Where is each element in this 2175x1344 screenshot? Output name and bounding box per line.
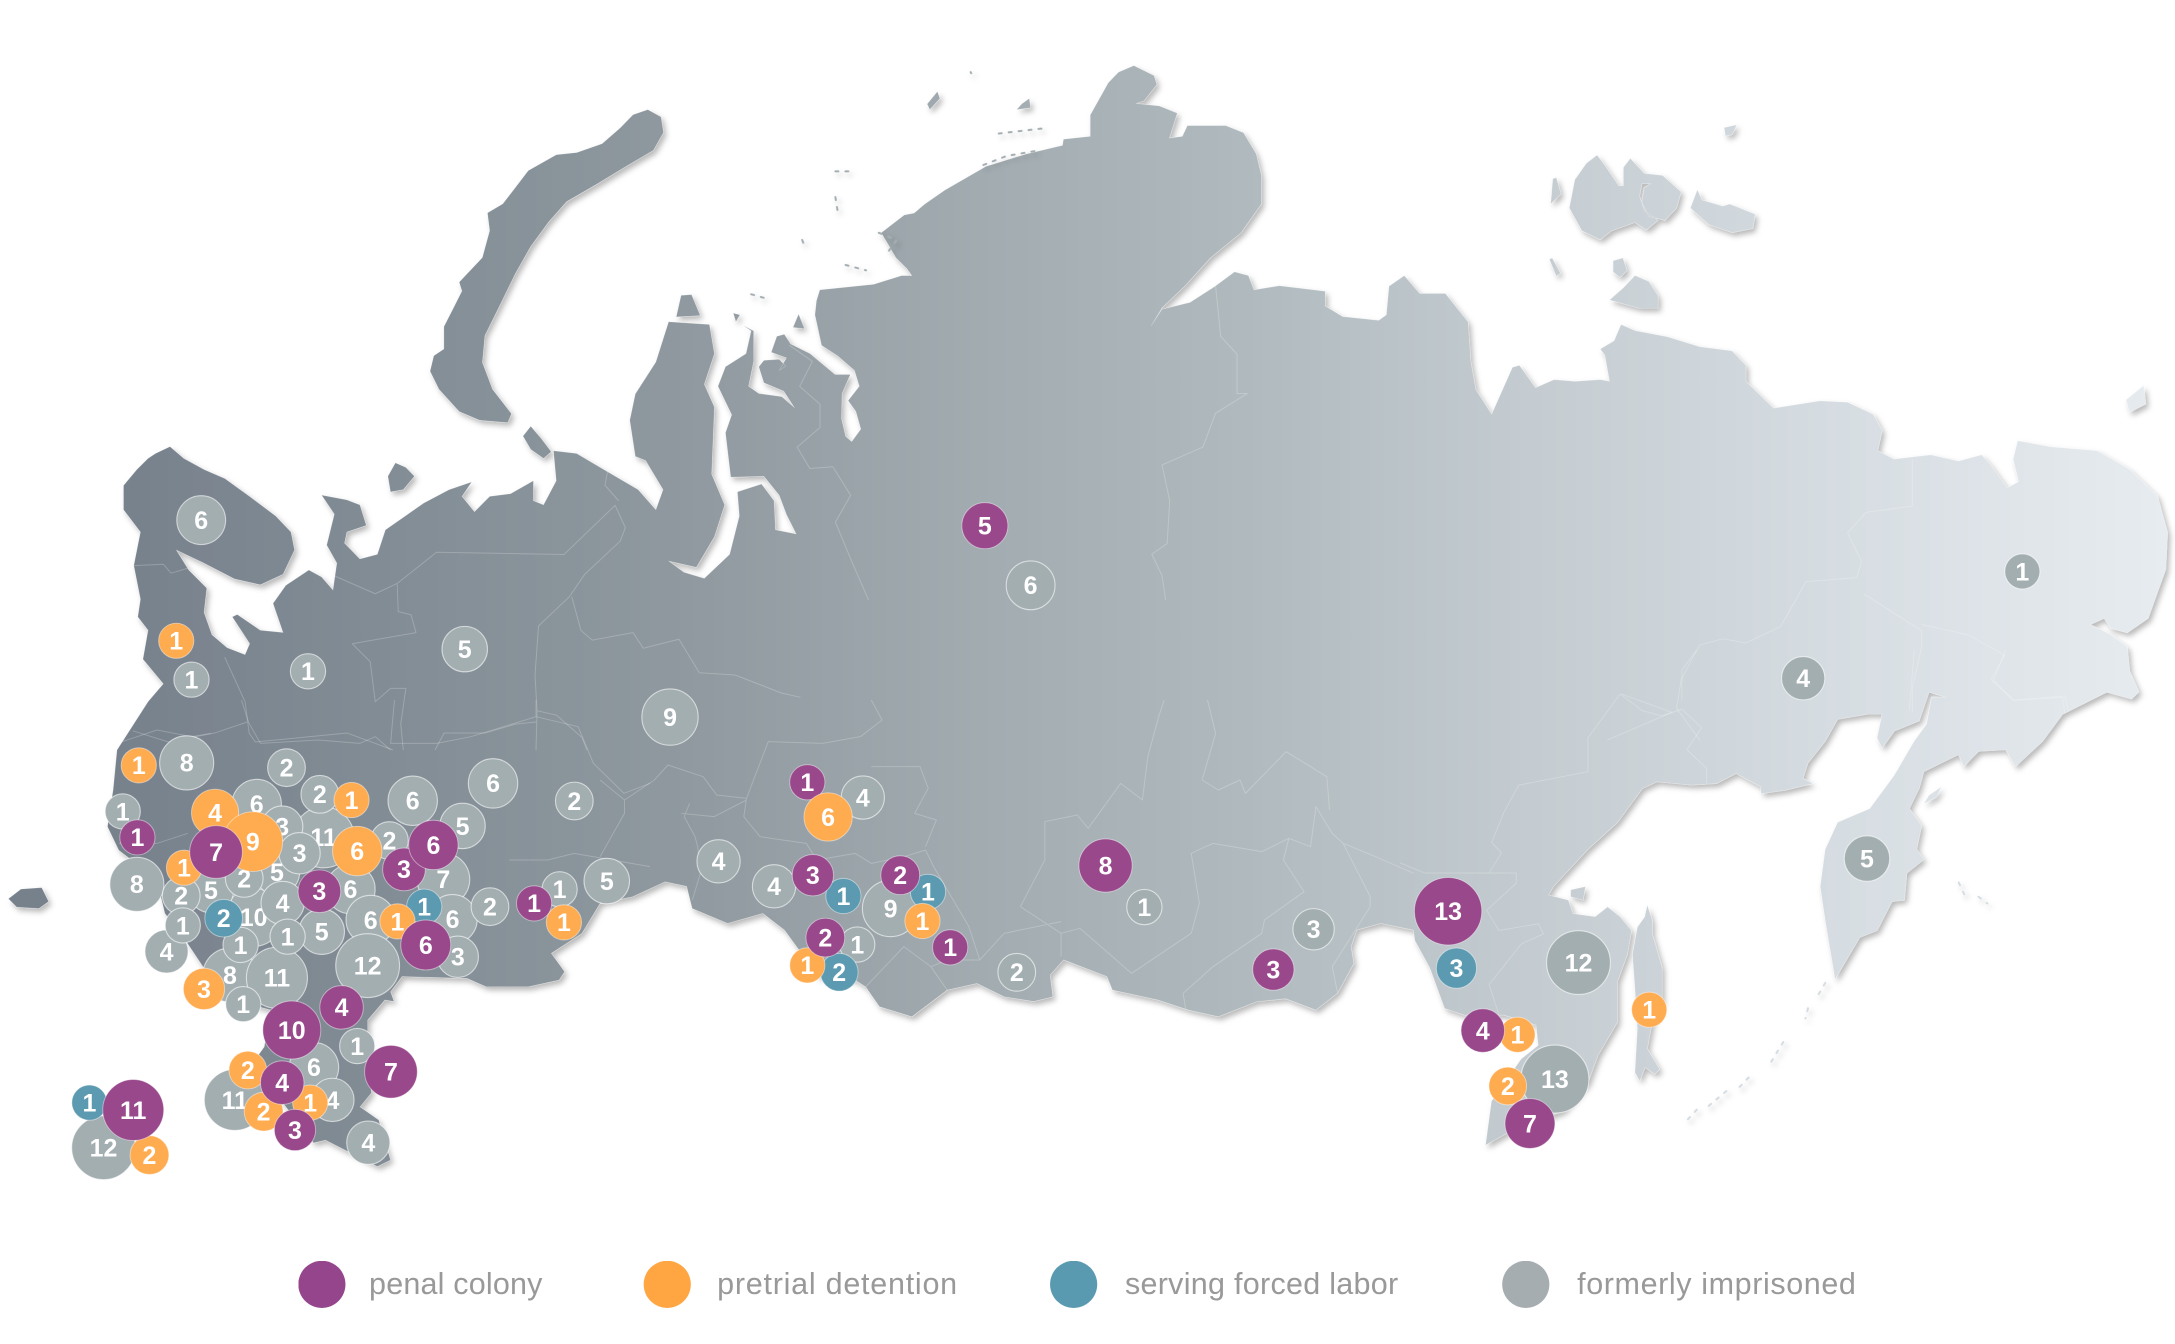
marker: serving forced labor 1: 1 [417,894,431,922]
marker: penal colony 4 [260,1061,304,1104]
marker: formerly imprisoned 3 [1293,909,1334,950]
marker: pretrial detention 4 [192,789,239,836]
marker: formerly imprisoned 8: 8 [130,871,144,899]
marker: penal colony 10 [263,1001,321,1059]
marker: formerly imprisoned 11: 11 [264,965,290,993]
marker: formerly imprisoned 1 [1127,889,1162,925]
marker: penal colony 1 [516,886,552,921]
marker: serving forced labor 1 [826,878,861,914]
marker: formerly imprisoned 4 [841,776,884,819]
marker: formerly imprisoned 6 [468,759,518,808]
marker: formerly imprisoned 6: 6 [364,907,378,935]
marker: formerly imprisoned 13: 13 [1541,1066,1569,1094]
marker: formerly imprisoned 6 [177,496,226,545]
marker: penal colony 4: 4 [1476,1017,1490,1045]
region borders [117,286,2072,1017]
legend item: formerly imprisoned: formerly imprisoned [1577,1267,1856,1301]
marker: penal colony 5: 5 [978,513,992,541]
marker: penal colony 1: 1 [800,769,814,797]
marker: pretrial detention 2 [229,1051,267,1089]
marker: pretrial detention 2 [244,1092,283,1131]
marker: formerly imprisoned 7 [417,853,470,906]
marker: penal colony 7 [190,826,242,878]
marker: pretrial detention 1: 1 [916,908,930,936]
marker: penal colony 13: 13 [1434,898,1462,926]
marker: pretrial detention 1 [159,623,194,658]
marker: formerly imprisoned 1 [223,927,258,963]
marker: penal colony 2 [881,856,920,895]
marker: formerly imprisoned 3: 3 [293,840,306,868]
marker: formerly imprisoned 5: 5 [270,859,284,887]
marker: formerly imprisoned 8 [203,948,257,1002]
marker: penal colony 7 [365,1045,417,1098]
marker: penal colony 2: 2 [818,924,832,952]
marker: pretrial detention 1 [166,850,202,885]
marker: serving forced labor 2: 2 [832,959,846,987]
marker: formerly imprisoned 1: 1 [236,991,250,1019]
marker: serving forced labor 3 [1436,948,1477,988]
marker: penal colony 4 [320,986,363,1029]
marker: formerly imprisoned 5 [299,909,344,954]
marker: penal colony 6 [409,820,458,870]
marker: formerly imprisoned 8: 8 [223,962,237,990]
marker: serving forced labor 1 [407,889,442,924]
legend item: formerly imprisoned [1502,1261,1856,1308]
legend item: penal colony: penal colony [369,1267,543,1301]
marker: pretrial detention 2 [130,1136,169,1175]
marker: penal colony 1: 1 [943,934,957,962]
marker: penal colony 5 [962,503,1008,549]
marker: formerly imprisoned 4: 4 [767,873,781,901]
marker: pretrial detention 1: 1 [132,752,146,780]
marker: formerly imprisoned 2 [162,877,200,915]
legend item: serving forced labor [1050,1261,1398,1308]
marker: formerly imprisoned 10 [225,888,283,946]
marker: formerly imprisoned 9: 9 [884,895,897,923]
marker: formerly imprisoned 3 [437,936,478,977]
marker: formerly imprisoned 5 [188,867,234,913]
marker: penal colony 4 [1461,1009,1505,1052]
marker: penal colony 2: 2 [893,862,907,890]
marker: serving forced labor 1: 1 [836,883,850,911]
marker: penal colony 3: 3 [288,1117,302,1145]
marker: formerly imprisoned 1: 1 [553,876,567,904]
marker: pretrial detention 1: 1 [557,909,571,937]
marker: formerly imprisoned 8: 8 [180,750,194,778]
marker: formerly imprisoned 1: 1 [850,931,864,959]
marker: formerly imprisoned 4: 4 [361,1130,375,1158]
marker: formerly imprisoned 1 [290,654,326,689]
marker: formerly imprisoned 11: 11 [310,824,337,852]
marker: formerly imprisoned 6 [1006,561,1055,610]
marker: penal colony 4: 4 [275,1070,289,1098]
marker: pretrial detention 6: 6 [350,838,364,866]
marker: formerly imprisoned 1: 1 [1137,894,1151,922]
marker: formerly imprisoned 5: 5 [204,877,218,905]
marker: pretrial detention 3 [183,968,225,1010]
marker: penal colony 6: 6 [419,932,433,960]
marker: formerly imprisoned 5 [1844,836,1890,881]
marker: pretrial detention 1 [1500,1017,1535,1052]
marker: formerly imprisoned 5: 5 [456,813,470,841]
marker: formerly imprisoned 6 [346,895,395,945]
marker: pretrial detention 1 [380,904,415,939]
marker: formerly imprisoned 5: 5 [600,868,614,896]
marker: formerly imprisoned 6: 6 [194,507,208,535]
marker: formerly imprisoned 1 [2005,554,2040,589]
marker: formerly imprisoned 5 [584,858,630,904]
marker: formerly imprisoned 1 [165,908,200,943]
marker: pretrial detention 3: 3 [197,976,211,1004]
marker: pretrial detention 1: 1 [177,855,191,883]
marker: penal colony 10: 10 [278,1017,306,1045]
marker: pretrial detention 9: 9 [246,829,260,857]
marker: formerly imprisoned 1: 1 [301,658,315,686]
marker: pretrial detention 2 [1489,1067,1527,1105]
marker: penal colony 1 [120,820,155,855]
marker: formerly imprisoned 12 [1547,931,1610,994]
marker: formerly imprisoned 6: 6 [250,791,264,819]
marker: formerly imprisoned 5 [442,626,487,672]
marker: formerly imprisoned 2 [555,782,593,820]
marker: formerly imprisoned 12 [336,934,400,998]
small islands [751,72,1987,1121]
marker: pretrial detention 6: 6 [821,804,835,832]
marker: formerly imprisoned 1 [270,919,305,954]
marker: serving forced labor 2 [820,953,858,991]
marker: formerly imprisoned 2: 2 [567,788,581,816]
marker: formerly imprisoned 13 [1521,1045,1589,1113]
marker: formerly imprisoned 6: 6 [1024,572,1038,600]
map markers [72,496,2040,1180]
marker: formerly imprisoned 11 [246,947,307,1008]
marker: formerly imprisoned 5: 5 [315,919,329,947]
marker: formerly imprisoned 1: 1 [116,798,130,826]
marker: formerly imprisoned 2 [998,953,1036,991]
marker: pretrial detention 1 [293,1085,328,1120]
marker: serving forced labor 2: 2 [217,905,231,933]
marker: formerly imprisoned 1 [105,794,140,829]
marker: penal colony 8: 8 [1099,852,1113,880]
marker: formerly imprisoned 6 [326,864,375,914]
marker: formerly imprisoned 12: 12 [354,953,382,981]
marker: formerly imprisoned 2: 2 [382,827,396,855]
marker: pretrial detention 4: 4 [208,800,222,828]
marker: formerly imprisoned 5 [254,849,300,895]
marker: pretrial detention 6 [804,793,852,841]
marker: formerly imprisoned 2 [471,888,509,926]
marker: penal colony 11 [103,1079,164,1141]
marker: formerly imprisoned 4 [261,881,304,925]
marker: formerly imprisoned 1: 1 [281,924,295,952]
marker: formerly imprisoned 2: 2 [1010,959,1024,987]
marker: pretrial detention 1 [1632,992,1667,1027]
marker: formerly imprisoned 1 [174,662,209,697]
marker: pretrial detention 1: 1 [169,628,183,656]
marker: formerly imprisoned 6: 6 [446,906,459,934]
marker: formerly imprisoned 4 [752,865,796,908]
marker: pretrial detention 1: 1 [303,1090,317,1118]
marker: pretrial detention 1: 1 [800,952,814,980]
marker: formerly imprisoned 6: 6 [406,788,420,816]
marker: pretrial detention 1: 1 [345,787,359,815]
marker: pretrial detention 1: 1 [1511,1022,1525,1050]
marker: penal colony 8 [1079,839,1132,892]
marker: formerly imprisoned 2: 2 [483,894,497,922]
marker: formerly imprisoned 2 [371,822,408,859]
marker: pretrial detention 6 [333,826,382,876]
marker: pretrial detention 1 [905,903,940,939]
marker: formerly imprisoned 4 [145,930,188,973]
marker: pretrial detention 1 [546,905,582,940]
marker: formerly imprisoned 4: 4 [276,890,290,918]
marker: formerly imprisoned 4 [311,1078,354,1122]
marker: penal colony 1: 1 [130,824,144,852]
marker: formerly imprisoned 5: 5 [1860,845,1874,873]
marker: formerly imprisoned 1 [226,987,261,1022]
marker: formerly imprisoned 1: 1 [176,912,190,940]
marker: formerly imprisoned 4: 4 [712,848,726,876]
marker: formerly imprisoned 11: 11 [222,1087,248,1115]
marker: serving forced labor 1: 1 [82,1090,96,1118]
marker: formerly imprisoned 3: 3 [451,944,465,972]
marker: formerly imprisoned 3: 3 [1307,916,1321,944]
marker: penal colony 3 [298,870,341,913]
marker: formerly imprisoned 6: 6 [307,1054,321,1082]
marker: formerly imprisoned 9 [862,880,919,937]
marker: penal colony 3 [274,1109,316,1151]
marker: formerly imprisoned 1: 1 [234,932,248,960]
marker: formerly imprisoned 7: 7 [436,866,450,894]
marker: formerly imprisoned 4: 4 [1796,665,1810,693]
marker: pretrial detention 2: 2 [257,1099,271,1127]
marker: penal colony 3: 3 [397,856,411,884]
marker: formerly imprisoned 9: 9 [663,704,677,732]
marker: formerly imprisoned 6 [232,779,281,829]
marker: penal colony 4: 4 [335,994,349,1022]
marker: formerly imprisoned 2: 2 [174,883,188,911]
marker: penal colony 3: 3 [1266,956,1280,984]
legend item: serving forced labor: serving forced labor [1125,1267,1398,1301]
marker: formerly imprisoned 2: 2 [313,781,327,809]
marker: formerly imprisoned 4 [347,1121,390,1164]
marker: formerly imprisoned 9 [642,689,698,745]
marker: formerly imprisoned 2 [301,775,339,813]
marker: formerly imprisoned 4 [1782,657,1825,700]
legend item: pretrial detention: pretrial detention [717,1267,957,1301]
marker: penal colony 2 [806,918,845,957]
marker: formerly imprisoned 6: 6 [344,876,357,904]
marker: formerly imprisoned 2 [225,860,263,897]
marker: pretrial detention 2: 2 [143,1142,156,1170]
marker: formerly imprisoned 10: 10 [240,904,268,932]
marker: formerly imprisoned 8 [160,736,214,790]
marker: penal colony 3: 3 [806,862,820,890]
marker: penal colony 7: 7 [384,1059,398,1087]
marker: formerly imprisoned 4: 4 [325,1087,339,1115]
marker: penal colony 7: 7 [1523,1110,1537,1138]
marker: formerly imprisoned 4 [697,840,740,883]
marker: formerly imprisoned 12 [72,1116,135,1180]
marker: formerly imprisoned 3: 3 [275,814,289,842]
marker: formerly imprisoned 11 [293,807,354,868]
marker: formerly imprisoned 1 [840,927,875,962]
marker: serving forced labor 2 [205,899,243,937]
marker: pretrial detention 9 [223,812,283,871]
marker: pretrial detention 2: 2 [1501,1073,1515,1101]
marker: formerly imprisoned 5: 5 [458,636,472,664]
marker: formerly imprisoned 1 [340,1028,375,1064]
marker: penal colony 3 [1253,949,1294,990]
marker: serving forced labor 1: 1 [921,879,935,907]
marker: formerly imprisoned 6 [289,1043,339,1092]
marker: serving forced labor 1 [72,1085,107,1120]
marker: penal colony 1 [790,765,825,800]
marker: formerly imprisoned 11 [204,1069,265,1130]
legend item: pretrial detention [644,1261,957,1308]
marker: pretrial detention 2: 2 [241,1057,255,1085]
marker: pretrial detention 1 [334,782,369,818]
marker: formerly imprisoned 3 [262,806,303,847]
marker: formerly imprisoned 6 [428,895,477,944]
marker: penal colony 11: 11 [120,1097,147,1125]
marker: formerly imprisoned 6 [388,776,437,825]
marker: pretrial detention 1 [790,948,825,983]
marker: pretrial detention 1: 1 [1642,997,1656,1025]
marker: penal colony 3: 3 [312,878,326,906]
marker: formerly imprisoned 1: 1 [350,1033,364,1061]
marker: formerly imprisoned 12: 12 [1565,949,1592,977]
marker: penal colony 6: 6 [426,832,440,860]
marker: formerly imprisoned 8 [110,857,164,911]
marker: formerly imprisoned 4: 4 [160,938,174,966]
marker: formerly imprisoned 1 [542,872,577,907]
marker: formerly imprisoned 2: 2 [237,865,251,893]
marker: formerly imprisoned 12: 12 [90,1135,117,1163]
marker: pretrial detention 1: 1 [391,908,405,936]
marker: penal colony 1 [933,930,968,965]
marker: formerly imprisoned 1: 1 [185,667,199,695]
marker: penal colony 7: 7 [209,839,223,867]
marker: serving forced labor 3: 3 [1449,955,1463,983]
legend [298,1261,1856,1308]
marker: formerly imprisoned 1: 1 [2015,558,2029,586]
marker: penal colony 3 [383,848,425,891]
marker: penal colony 1: 1 [527,890,541,918]
marker: penal colony 13 [1414,878,1482,945]
marker: formerly imprisoned 2 [268,749,305,787]
marker: penal colony 6 [401,920,451,970]
marker: pretrial detention 1 [121,748,156,783]
marker: formerly imprisoned 4: 4 [856,784,870,812]
marker: penal colony 7 [1505,1099,1555,1148]
marker: serving forced labor 1 [910,874,946,909]
legend item: penal colony [298,1261,543,1308]
marker: formerly imprisoned 2: 2 [280,755,293,783]
marker: penal colony 3 [792,855,834,896]
marker: formerly imprisoned 3 [279,833,320,874]
marker: formerly imprisoned 5 [440,803,485,849]
marker: formerly imprisoned 6: 6 [486,770,500,798]
